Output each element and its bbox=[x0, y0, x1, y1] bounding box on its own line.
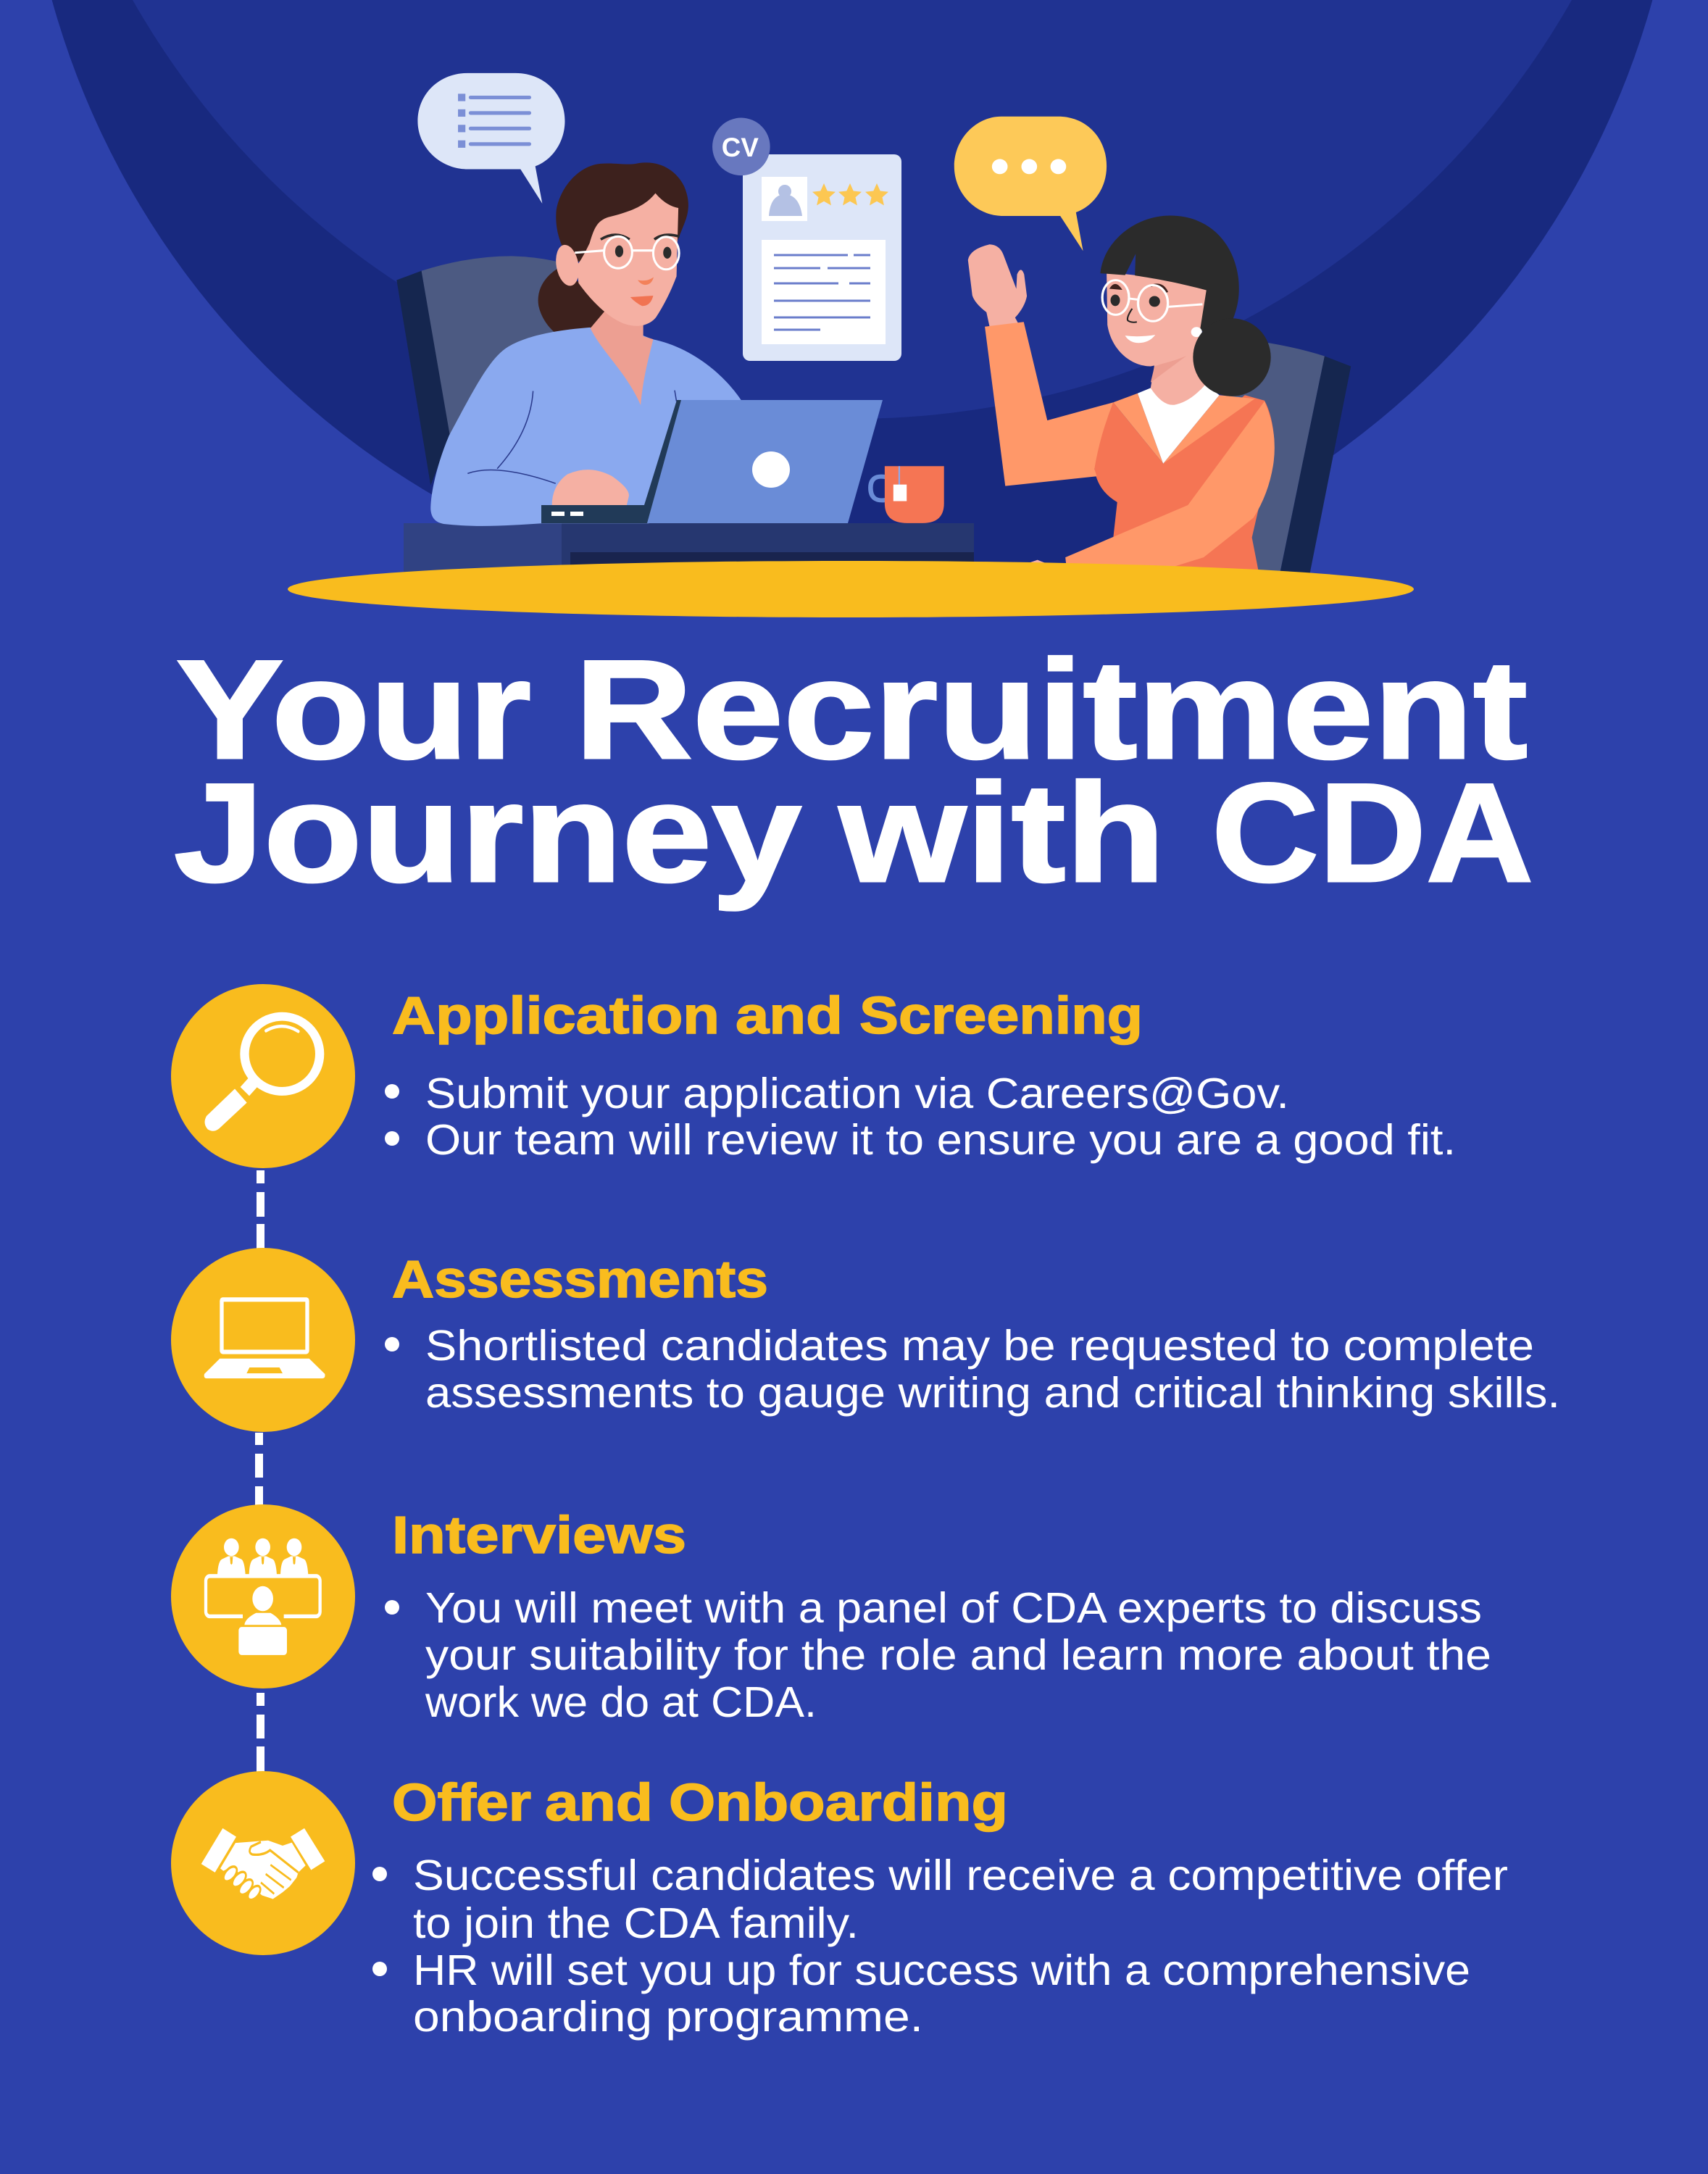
step 1 text: Application and Screening: and bbox=[736, 987, 843, 1045]
step 2 icon: laptop bbox=[171, 1248, 355, 1432]
hair bbox=[556, 162, 688, 262]
speech bubble: dots bbox=[954, 117, 1107, 251]
woman on the right bbox=[870, 117, 1351, 575]
chair bbox=[396, 256, 560, 486]
title: Your bbox=[176, 631, 531, 788]
step 4 text: Offer and Onboarding: HR will set you up for success with a comprehensive bbox=[413, 1946, 1470, 1994]
title: with bbox=[838, 754, 1165, 912]
step 1 icon: magnifying glass bbox=[171, 984, 355, 1168]
step 1 text: Application and Screening: Submit your application via Careers@Gov. bbox=[425, 1070, 1289, 1117]
hair bbox=[1100, 216, 1239, 332]
step 2 text: Assessments: Assessments bbox=[392, 1251, 768, 1309]
step 2 text: Assessments: Shortlisted candidates may be requested to complete bbox=[425, 1322, 1534, 1370]
step 3 icon: interview panel bbox=[171, 1504, 355, 1688]
laptop bbox=[541, 400, 883, 523]
nose and mouth bbox=[1125, 309, 1155, 343]
sleeve creases bbox=[467, 391, 677, 483]
step 4 text: Offer and Onboarding: to join the CDA family. bbox=[413, 1899, 859, 1947]
step 4 text: Offer and Onboarding: Offer bbox=[392, 1774, 531, 1832]
nose and lips bbox=[630, 277, 654, 306]
connector: step 1 to 2 bbox=[257, 1170, 264, 1249]
torso bbox=[430, 328, 741, 526]
step 2 text: Assessments bbox=[385, 1251, 1560, 1417]
step 1 text: Application and Screening bbox=[385, 987, 1456, 1164]
step 4 text: Offer and Onboarding: and bbox=[545, 1774, 653, 1832]
step 1 text: Application and Screening: Application bbox=[392, 987, 720, 1045]
CV badge bbox=[712, 118, 770, 175]
hand under desk bbox=[1027, 560, 1049, 565]
torso bbox=[1066, 395, 1275, 572]
earring bbox=[1191, 327, 1202, 337]
step 4 text: Offer and Onboarding bbox=[372, 1774, 1508, 2041]
hand bbox=[552, 470, 629, 506]
step 4 text: Offer and Onboarding: Successful candidates will receive a competitive offer bbox=[413, 1852, 1508, 1899]
connector: step 2 to 3 bbox=[255, 1433, 263, 1505]
illustration: two women at a desk bbox=[288, 73, 1414, 617]
step 4 text: Offer and Onboarding: onboarding programme. bbox=[413, 1993, 923, 2041]
step 1 text: Application and Screening: Screening bbox=[859, 987, 1143, 1045]
neck bbox=[591, 312, 653, 405]
title: Journey bbox=[174, 754, 801, 912]
hair bun bbox=[538, 267, 608, 336]
woman on the left bbox=[396, 73, 770, 526]
step 3 text: Interviews: your suitability for the role and learn more about the bbox=[425, 1631, 1491, 1679]
glasses and eyes bbox=[575, 235, 680, 270]
step 1 text: Application and Screening: Our team will review it to ensure you are a good fit. bbox=[425, 1116, 1456, 1164]
step 4 icon: handshake bbox=[171, 1771, 355, 1955]
title bbox=[174, 631, 1533, 912]
ear bbox=[553, 243, 582, 288]
face bbox=[1107, 272, 1207, 366]
step 4 text: Offer and Onboarding: Onboarding bbox=[669, 1774, 1008, 1832]
desk bbox=[404, 523, 974, 574]
step 3 text: Interviews: Interviews bbox=[392, 1507, 686, 1565]
mug bbox=[870, 466, 944, 523]
step 2 text: Assessments: assessments to gauge writing and critical thinking skills. bbox=[425, 1369, 1560, 1417]
lapels and forearm bbox=[1065, 393, 1275, 567]
CV badge: CV bbox=[722, 133, 759, 162]
connector: step 3 to 4 bbox=[257, 1693, 264, 1772]
title: Recruitment bbox=[575, 631, 1528, 788]
title: CDA bbox=[1212, 754, 1533, 912]
hair bun bbox=[1193, 318, 1271, 396]
raised sleeve bbox=[985, 322, 1113, 486]
step 3 text: Interviews bbox=[385, 1507, 1491, 1726]
step 3 text: Interviews: You will meet with a panel of CDA experts to discuss bbox=[425, 1584, 1482, 1632]
neck and collar bbox=[1138, 349, 1220, 464]
chair bbox=[1229, 343, 1351, 575]
CV card bbox=[743, 154, 901, 361]
background arcs bbox=[22, 0, 1683, 609]
raised hand bbox=[968, 244, 1027, 327]
speech bubble: list bbox=[417, 73, 565, 204]
step 3 text: Interviews: work we do at CDA. bbox=[425, 1678, 817, 1726]
face bbox=[577, 193, 678, 326]
glasses and eyes bbox=[1102, 280, 1202, 321]
yellow table bbox=[288, 561, 1414, 617]
